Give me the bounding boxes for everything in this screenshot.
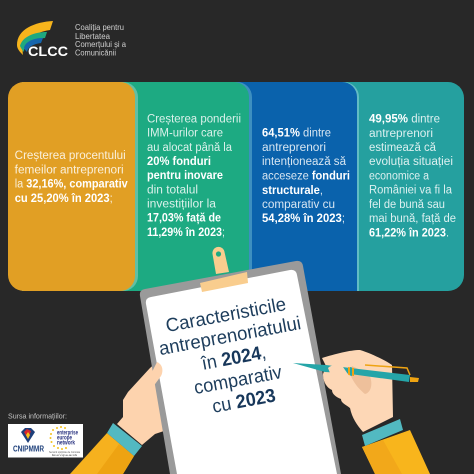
- paper: [146, 270, 337, 474]
- teal panel text: [369, 114, 456, 240]
- sleeve: [70, 433, 134, 474]
- green panel background: [120, 82, 249, 291]
- green panel text: pentru inovare: [147, 170, 223, 182]
- illustration: left hand: [70, 362, 170, 474]
- teal panel text: 61,22% în 2023.: [369, 228, 449, 240]
- green panel text: investițiilor la: [147, 198, 217, 210]
- hand: [117, 362, 170, 445]
- pen end: [410, 377, 419, 382]
- orange panel background: [8, 82, 135, 291]
- organisation name: Coaliția pentru: [75, 23, 124, 32]
- orange panel text: [15, 150, 128, 205]
- green panel text: 20% fonduri: [147, 156, 211, 168]
- blue panel text: antreprenori: [262, 142, 326, 154]
- blue panel text: 64,51% dintre: [262, 128, 331, 140]
- organisation name: [75, 23, 127, 58]
- green panel text: 11,29% în 2023;: [147, 227, 225, 239]
- clipboard title: antreprenoriatului: [157, 313, 303, 360]
- teal panel text: economice a: [369, 170, 430, 182]
- blue panel text: 54,28% în 2023;: [262, 213, 345, 225]
- green panel text: au alocat până la: [147, 142, 233, 154]
- logo wordmark: CLCC: [28, 43, 68, 59]
- green panel edge: [120, 82, 252, 291]
- small caption: Europeană: [52, 454, 78, 457]
- teal panel text: României va fi la: [369, 185, 453, 197]
- green panel text: 17,03% față de: [147, 213, 221, 225]
- pen rings: [348, 367, 354, 376]
- green panel text: Creșterea ponderii: [147, 114, 241, 126]
- palm shade: [350, 366, 371, 394]
- blue panel text: structurale,: [262, 185, 323, 197]
- orange panel edge: [22, 82, 138, 291]
- blue panel background: [230, 82, 357, 291]
- teal panel text: mai bună, față de: [369, 213, 456, 225]
- CNIPMMR wordmark: CNIPMMR: [13, 445, 44, 454]
- teal panel background: [330, 82, 464, 291]
- blue panel edge: [230, 82, 359, 291]
- icon: EU stars: [50, 426, 67, 450]
- panel: green innovation funds: [120, 82, 252, 291]
- pen clip: [365, 365, 410, 375]
- clipboard title: comparativ: [192, 362, 284, 399]
- blue panel text: comparativ cu: [262, 199, 335, 211]
- clipboard title: în 2024,: [199, 342, 268, 375]
- clipboard board: [140, 261, 341, 474]
- organisation name: Comerțului și a: [75, 40, 127, 49]
- panel: orange women entrepreneurs: [8, 82, 138, 291]
- blue panel text: intenționează să: [262, 156, 347, 168]
- cuff: [362, 419, 403, 446]
- sleeve shade: [362, 440, 402, 474]
- panel: teal economic outlook: [330, 82, 464, 291]
- clipboard: [140, 247, 341, 474]
- pen body: [293, 363, 410, 382]
- sleeve: [362, 430, 430, 474]
- teal panel text: fel de bună sau: [369, 199, 445, 211]
- organisation name: Comunicănii: [75, 48, 116, 58]
- logo background: [8, 424, 83, 458]
- orange panel text: cu 25,20% în 2023;: [15, 193, 113, 205]
- logo: CLCC: [17, 21, 127, 59]
- enterprise europe network wordmark: enterprise: [57, 430, 78, 436]
- icon: CNIPMMR diamond: [21, 428, 35, 443]
- blue panel text: acceseze fonduri: [262, 170, 350, 182]
- small caption: [49, 451, 81, 457]
- clipboard title: cu 2023: [211, 385, 277, 418]
- hand: [322, 350, 393, 432]
- source logos: [8, 424, 83, 458]
- orange panel text: Creșterea procentului: [15, 150, 126, 162]
- enterprise europe network wordmark: network: [57, 440, 76, 446]
- green panel text: [147, 114, 241, 239]
- small caption: Servicii sprijinite de Comisia: [49, 451, 81, 454]
- orange panel text: la 32,16%, comparativ: [15, 179, 128, 191]
- source label: Sursa informațiilor:: [8, 412, 67, 421]
- teal panel text: evoluția situației: [369, 156, 453, 168]
- illustration: right hand with pen: [293, 350, 430, 474]
- thumb over clipboard: [143, 362, 162, 395]
- green panel text: IMM-urilor care: [147, 128, 223, 140]
- orange panel text: femeilor antreprenori: [15, 164, 124, 176]
- enterprise europe network wordmark: europe: [57, 436, 72, 442]
- enterprise europe network wordmark: [57, 430, 78, 446]
- organisation name: Libertatea: [75, 32, 111, 41]
- blue panel text: [262, 128, 350, 225]
- logo mark arcs: [17, 21, 53, 55]
- teal panel text: estimează că: [369, 142, 437, 154]
- clip: [200, 247, 248, 292]
- clipboard title: [157, 294, 303, 418]
- teal panel text: antreprenori: [369, 128, 433, 140]
- clip base: [200, 272, 248, 292]
- green panel text: din totalul: [147, 184, 198, 196]
- pen: [293, 363, 419, 382]
- panel: blue structural funds: [230, 82, 359, 291]
- clip tab: [212, 247, 229, 274]
- teal panel text: 49,95% dintre: [369, 114, 440, 126]
- finger over pen: [328, 365, 352, 408]
- clip hole: [216, 251, 221, 257]
- cuff: [107, 423, 142, 456]
- sleeve shade: [97, 444, 134, 474]
- clipboard title: Caracteristicile: [164, 294, 288, 337]
